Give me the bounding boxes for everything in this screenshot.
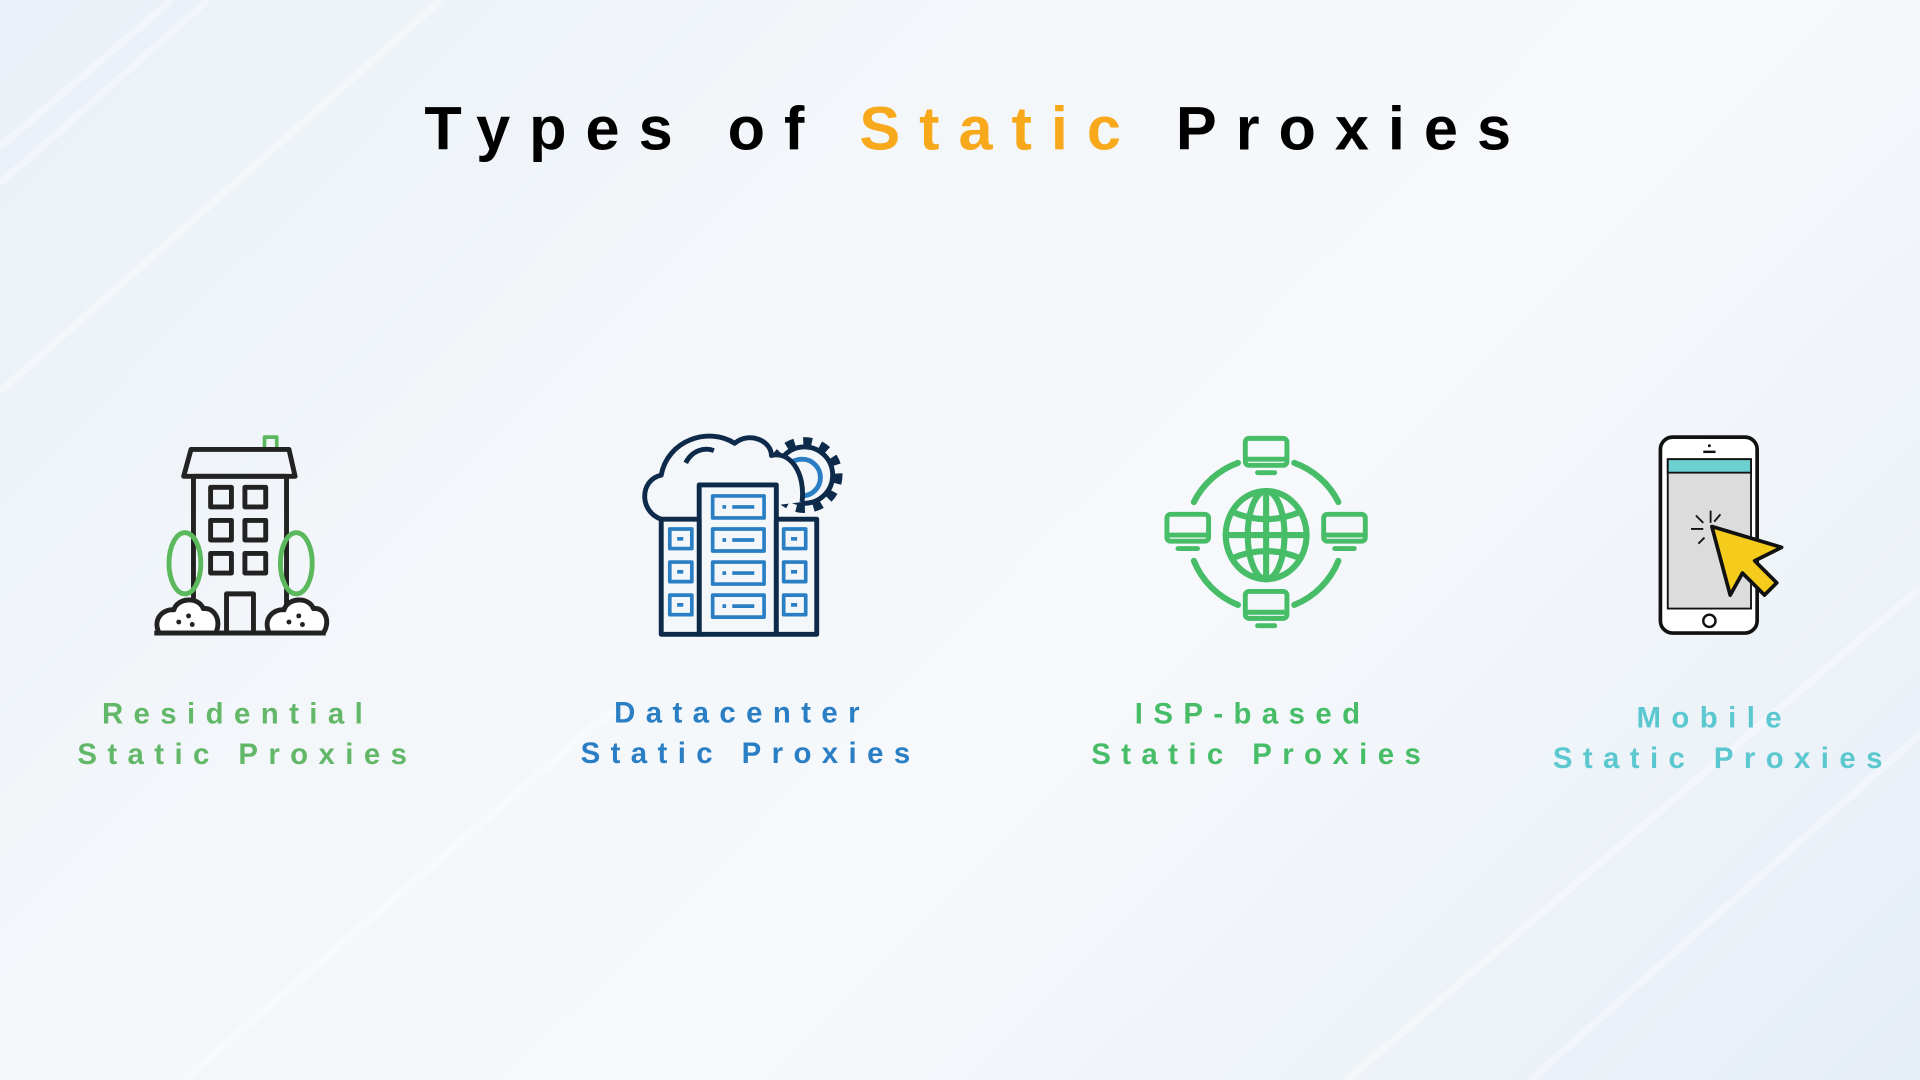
label: datacenter bbox=[581, 696, 921, 770]
label: ISP-based: Static Proxies bbox=[1091, 738, 1431, 771]
title: Types of Static Proxies bbox=[424, 94, 1530, 162]
icon: residential building bbox=[154, 437, 327, 633]
icon: ISP network bbox=[1167, 438, 1365, 626]
label: mobile: Mobile bbox=[1637, 701, 1792, 734]
label: mobile: Static Proxies bbox=[1553, 742, 1893, 775]
label: ISP-based bbox=[1091, 698, 1431, 771]
label: mobile bbox=[1553, 701, 1893, 775]
label: residential: Residential bbox=[102, 698, 373, 731]
icon: datacenter bbox=[645, 436, 838, 634]
label: residential bbox=[77, 698, 417, 771]
label: ISP-based: ISP-based bbox=[1135, 698, 1371, 731]
label: datacenter: Datacenter bbox=[614, 696, 870, 729]
icon: mobile phone bbox=[1660, 437, 1782, 633]
label: datacenter: Static Proxies bbox=[581, 737, 921, 770]
label: residential: Static Proxies bbox=[77, 738, 417, 771]
